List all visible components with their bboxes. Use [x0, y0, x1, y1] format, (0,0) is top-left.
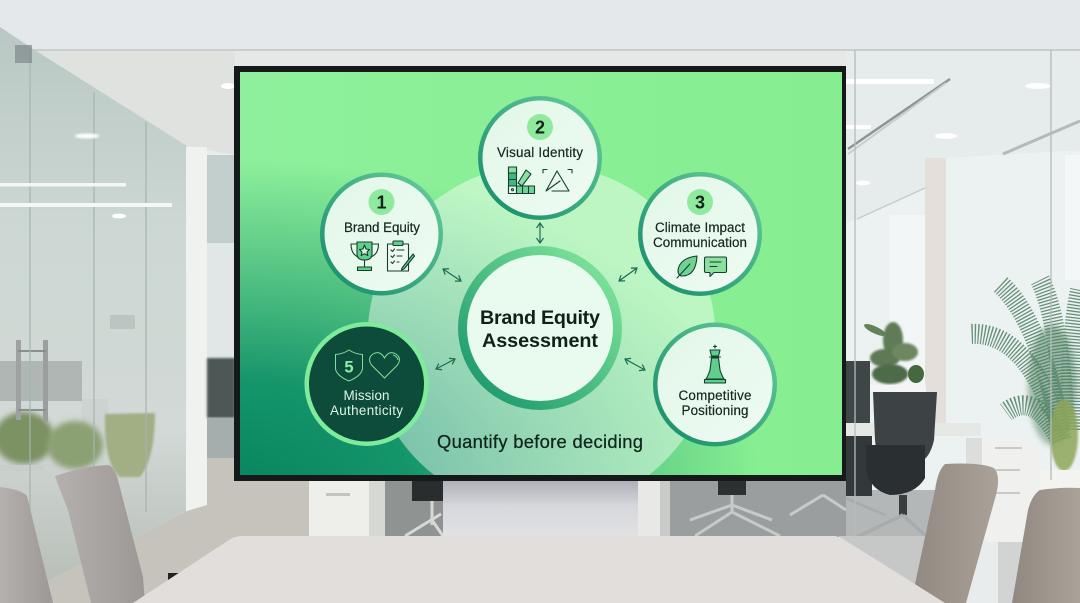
table — [133, 536, 945, 603]
number badge 1: 1 — [376, 192, 387, 212]
icon: triangle mark with corner brackets — [543, 170, 572, 191]
room furniture foreground — [0, 464, 1080, 603]
icon: speech bubble — [704, 257, 726, 276]
node 5: Mission Authenticity (highlighted): Authenticity — [330, 403, 403, 418]
office chair right — [846, 392, 937, 538]
node 1: Brand Equity — [320, 172, 443, 296]
icon: heart — [370, 353, 399, 378]
bezel — [234, 66, 846, 481]
left glass wall — [0, 27, 187, 603]
drawer unit — [966, 438, 1038, 542]
chair: left — [55, 465, 145, 603]
cabinets under screen — [309, 481, 369, 537]
inner ceiling left — [33, 51, 235, 155]
label: Visual Identity — [497, 145, 583, 160]
floor right — [670, 481, 846, 537]
icon: colour swatches — [508, 167, 534, 194]
number badge 2: 2 — [535, 118, 545, 138]
floor right near — [838, 536, 960, 603]
palm plant — [970, 280, 1080, 520]
centre node: Brand Equity Assessment: Brand Equity — [480, 307, 600, 329]
node 5: Mission Authenticity (highlighted) — [304, 322, 428, 446]
node 4: Competitive Positioning — [653, 322, 777, 446]
through-door area — [207, 155, 235, 243]
stand — [443, 481, 638, 537]
chair: left far — [0, 487, 53, 603]
node 2: Visual Identity — [478, 96, 602, 220]
icon: leaf — [677, 256, 697, 278]
node 3: Climate Impact Communication: Communication — [653, 235, 747, 250]
chair: right — [911, 464, 998, 603]
floor — [0, 458, 309, 603]
tagline: Quantify before deciding — [437, 431, 643, 452]
small plant — [863, 322, 924, 384]
icon: chess king — [704, 345, 726, 383]
window panels — [890, 215, 926, 385]
glass reflection furniture — [0, 361, 82, 401]
icon: shield with 5: 5 — [344, 358, 354, 376]
label: Climate Impact — [655, 220, 745, 235]
icon: trophy — [351, 242, 378, 270]
icon: clipboard — [388, 241, 414, 271]
far office chair — [846, 361, 870, 423]
node 3: Climate Impact Communication — [638, 172, 762, 296]
desk right — [868, 385, 926, 392]
chair: right far — [1012, 488, 1080, 603]
label: Brand Equity — [344, 220, 420, 235]
centre node: Brand Equity Assessment: Assessment — [482, 330, 598, 352]
right lights — [846, 79, 934, 84]
label: Mission — [344, 388, 390, 403]
screen background — [240, 72, 842, 475]
beige column — [925, 158, 946, 425]
number badge 3: 3 — [695, 192, 705, 212]
display screen — [234, 66, 846, 481]
wall right — [846, 51, 1080, 496]
glass mullions — [30, 50, 146, 530]
label: Competitive — [678, 388, 752, 403]
column — [186, 147, 207, 511]
door handle — [16, 340, 21, 420]
node 4: Competitive Positioning: Positioning — [682, 403, 748, 418]
left lights — [75, 134, 99, 138]
ceiling band — [0, 0, 1080, 50]
ceiling slots — [848, 79, 950, 149]
large translucent circle — [368, 164, 716, 475]
centre node: Brand Equity Assessment — [458, 246, 622, 410]
glass mullions right — [855, 50, 1051, 540]
connector arrows — [436, 223, 645, 370]
